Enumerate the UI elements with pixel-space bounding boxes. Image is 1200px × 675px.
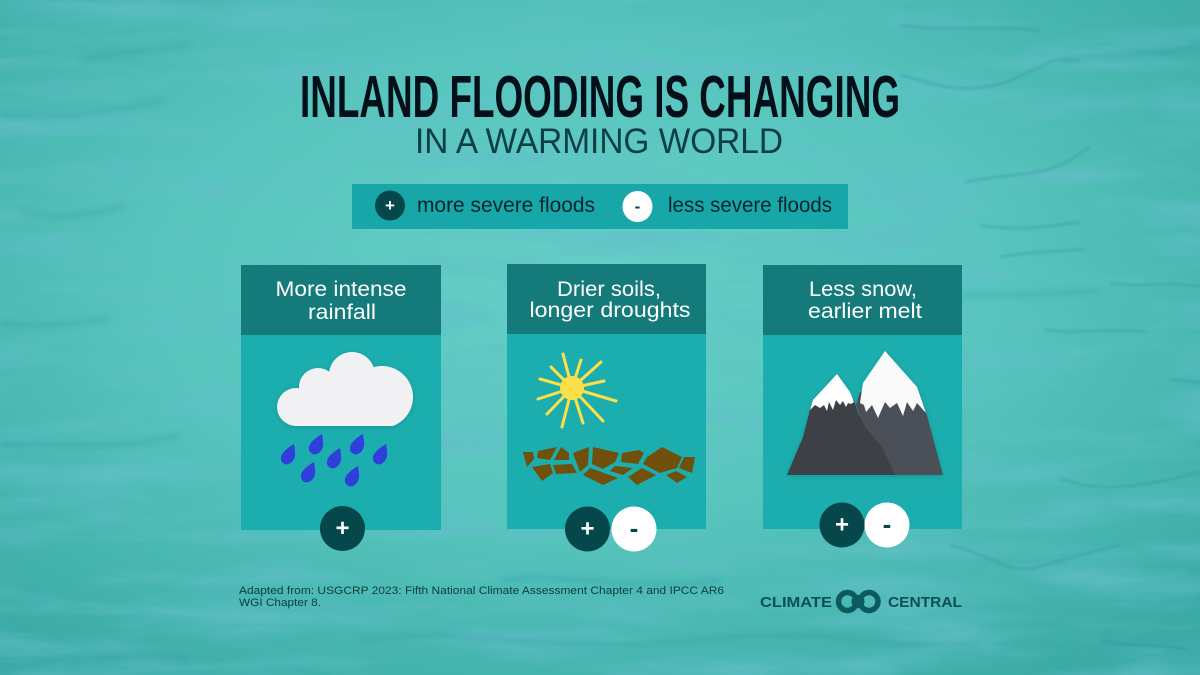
panel: more intense rainfall (241, 265, 441, 551)
logo: Climate Central: CENTRAL (888, 595, 962, 611)
subtitle: IN A WARMING WORLD (415, 122, 783, 161)
heading: more intense rainfall: More intense (276, 278, 406, 301)
heading: drier soils, longer droughts: Drier soils, (557, 278, 661, 301)
legend: more severe floods: more severe floods (417, 194, 595, 217)
source note: WGI Chapter 8. (239, 597, 321, 609)
heading: more intense rainfall: rainfall (308, 301, 376, 324)
heading: less snow, earlier melt: earlier melt (808, 300, 922, 323)
logo: Climate Central: CLIMATE (760, 595, 832, 611)
icon: sun (538, 354, 616, 427)
badge: plus (320, 506, 365, 551)
badges: plus and minus (820, 502, 910, 548)
icon: rain drops (281, 434, 387, 486)
legend: minus badge (622, 191, 652, 222)
logo: Climate Central (760, 592, 962, 611)
badges: plus and minus (565, 506, 656, 552)
heading: drier soils, longer droughts: longer droughts (530, 299, 690, 322)
badges: plus and minus: - (630, 513, 638, 543)
icon: cloud (277, 352, 413, 428)
legend: plus badge: + (385, 196, 395, 215)
panel: drier soils, longer droughts (507, 264, 706, 552)
legend (352, 184, 848, 229)
badges: plus and minus: - (883, 509, 891, 539)
panel: less snow, earlier melt (763, 265, 962, 548)
badge: plus: + (335, 515, 350, 542)
heading: less snow, earlier melt: Less snow, (809, 278, 917, 301)
legend: plus badge (375, 190, 405, 220)
legend: minus badge: - (635, 197, 640, 216)
logo mark: linked circles (838, 592, 878, 610)
icon: mountains (787, 351, 943, 475)
badges: plus and minus: + (835, 512, 849, 538)
legend: less severe floods: less severe floods (668, 194, 832, 217)
badges: plus and minus: + (580, 516, 595, 542)
source note: Adapted from: USGCRP 2023: Fifth National Climate Assessment Chapter 4 and IPCC AR6 (239, 585, 724, 597)
icon: cracked earth (523, 447, 695, 485)
